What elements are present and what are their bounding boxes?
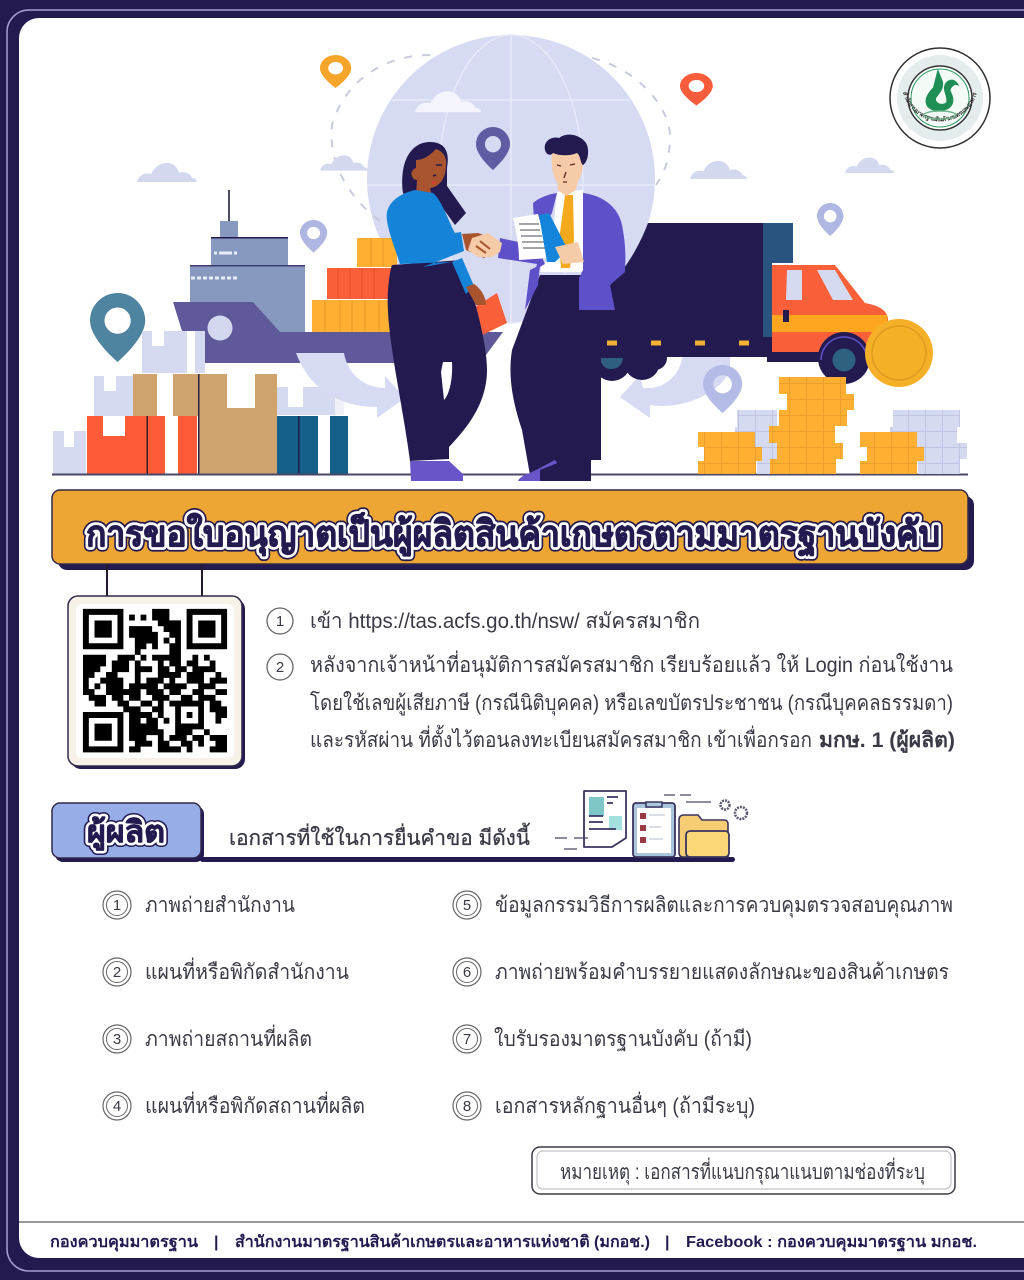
step 2: และรหัสผ่าน ที่ตั้งไว้ตอนลงทะเบียนสมัครสมาชิก เข้าเพื่อกรอก xyxy=(310,725,812,752)
dashed orbit xyxy=(332,55,670,225)
item 3: ภาพถ่ายสถานที่ผลิต xyxy=(145,1024,312,1051)
QR code sign xyxy=(68,565,245,769)
item 7: 7 xyxy=(463,1031,471,1048)
footer: | xyxy=(214,1234,218,1251)
footer: Facebook : กองควบคุมมาตรฐาน มกอช. xyxy=(686,1234,977,1252)
step 1: เข้า https://tas.acfs.go.th/nsw/ สมัครสมาชิก xyxy=(310,610,700,633)
item 3 xyxy=(103,1024,312,1053)
item 1: 1 xyxy=(113,897,121,914)
document list: right column xyxy=(453,891,953,1120)
item 1: ภาพถ่ายสำนักงาน xyxy=(145,894,295,917)
coin stacks xyxy=(698,377,967,474)
item 4: แผนที่หรือพิกัดสถานที่ผลิต xyxy=(145,1091,365,1118)
item 2 xyxy=(103,957,349,986)
logo seal xyxy=(889,47,991,149)
icon: documents, clipboard, folder and gears xyxy=(555,791,747,857)
item 5: ข้อมูลกรรมวิธีการผลิตและการควบคุมตรวจสอบคุณภาพ xyxy=(495,894,953,918)
clouds xyxy=(137,91,894,182)
item 6: 6 xyxy=(463,964,471,981)
title banner xyxy=(52,490,974,570)
item 4 xyxy=(103,1091,365,1120)
illustration: trade and logistics scene xyxy=(52,35,968,481)
item 2: แผนที่หรือพิกัดสำนักงาน xyxy=(145,957,349,984)
stacked boxes xyxy=(53,331,348,474)
document list: left column xyxy=(103,891,365,1120)
step 2: มกษ. 1 (ผู้ผลิต) xyxy=(819,728,955,754)
globe xyxy=(367,35,655,323)
ground line xyxy=(52,474,968,476)
section header: producer documents: เอกสารที่ใช้ในการยื่นคำขอ มีดังนี้ xyxy=(229,823,530,850)
producer tab label: ผู้ผลิต xyxy=(87,816,165,851)
step 1: 1 xyxy=(276,613,284,630)
remark box xyxy=(532,1147,955,1194)
footer: สำนักงานมาตรฐานสินค้าเกษตรและอาหารแห่งชาติ (มกอช.) xyxy=(235,1233,650,1252)
step 2: โดยใช้เลขผู้เสียภาษี (กรณีนิติบุคคล) หรือเลขบัตรประชาชน (กรณีบุคคลธรรมดา) xyxy=(310,691,953,716)
location pins xyxy=(90,55,843,362)
producer tab label: ผู้ผลิต xyxy=(87,816,165,851)
footer: | xyxy=(665,1234,669,1251)
item 2: 2 xyxy=(113,964,121,981)
section header: producer documents xyxy=(52,803,735,862)
item 7: ใบรับรองมาตรฐานบังคับ (ถ้ามี) xyxy=(494,1027,752,1051)
step 2 xyxy=(267,650,955,754)
delivery truck xyxy=(593,223,888,384)
item 8 xyxy=(453,1091,755,1120)
item 8: 8 xyxy=(463,1098,471,1115)
item 6: ภาพถ่ายพร้อมคำบรรยายแสดงลักษณะของสินค้าเกษตร xyxy=(495,961,949,984)
pin on arrow xyxy=(703,365,742,413)
title text: การขอใบอนุญาตเป็นผู้ผลิตสินค้าเกษตรตามมาตรฐานบังคับ xyxy=(86,511,940,557)
footer xyxy=(19,1221,1024,1252)
cargo ship xyxy=(173,190,503,363)
item 7 xyxy=(453,1025,752,1053)
title text: การขอใบอนุญาตเป็นผู้ผลิตสินค้าเกษตรตามมาตรฐานบังคับ xyxy=(86,511,940,557)
remark box: หมายเหตุ : เอกสารที่แนบกรุณาแนบตามช่องที่ระบุ xyxy=(560,1157,925,1185)
item 3: 3 xyxy=(113,1031,121,1048)
item 1 xyxy=(103,891,295,919)
man in purple suit xyxy=(468,135,625,481)
woman in blue shirt xyxy=(387,142,507,481)
footer: กองควบคุมมาตรฐาน xyxy=(50,1234,198,1252)
title text: การขอใบอนุญาตเป็นผู้ผลิตสินค้าเกษตรตามมาตรฐานบังคับ xyxy=(86,511,940,557)
producer tab label: ผู้ผลิต xyxy=(87,816,165,851)
step 2: หลังจากเจ้าหน้าที่อนุมัติการสมัครสมาชิก เรียบร้อยแล้ว ให้ Login ก่อนใช้งาน xyxy=(310,650,953,678)
large gold coin xyxy=(865,319,933,387)
curved arrows xyxy=(296,353,730,418)
item 5: 5 xyxy=(463,897,471,914)
item 8: เอกสารหลักฐานอื่นๆ (ถ้ามีระบุ) xyxy=(495,1091,755,1119)
item 4: 4 xyxy=(113,1098,121,1115)
step 2: 2 xyxy=(276,659,284,676)
